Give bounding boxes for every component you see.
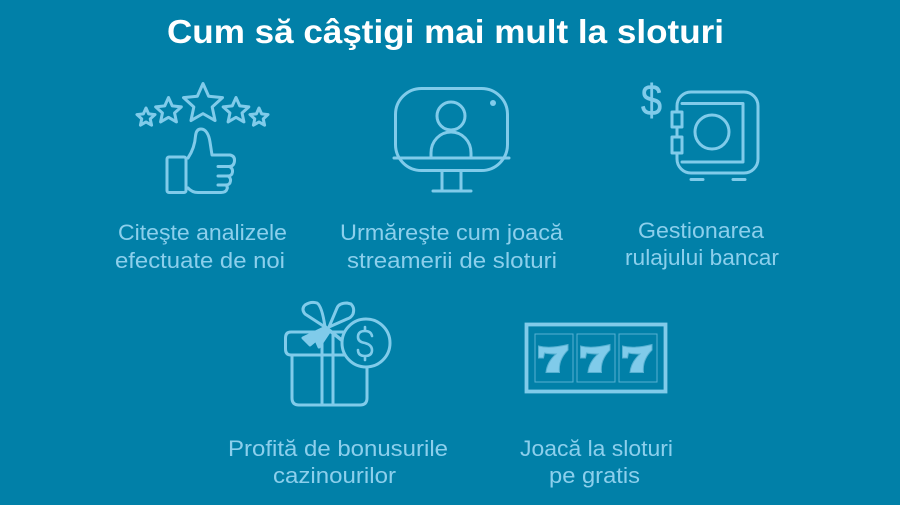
title: Cum să câştigi mai mult la sloturi (167, 13, 724, 50)
icon: dollar sign and safe (641, 76, 758, 180)
icon: dollar sign and safe: $ (641, 76, 662, 125)
icon: slot machine 777 (526, 324, 666, 392)
icon: five stars and thumbs up (137, 84, 268, 192)
caption: analize: Citeşte analizele (118, 220, 287, 245)
caption: rulaj: Gestionarea (638, 218, 765, 243)
caption: gratis: pe gratis (549, 463, 640, 488)
caption: gratis: Joacă la sloturi (520, 436, 673, 461)
caption: streameri: Urmăreşte cum joacă (340, 220, 564, 245)
caption: streameri: streamerii de sloturi (347, 248, 557, 273)
caption: bonusuri (228, 436, 448, 488)
caption: rulaj (625, 218, 779, 270)
caption: gratis (520, 436, 673, 488)
icon: monitor with streamer (394, 88, 509, 191)
caption: streameri (340, 220, 564, 273)
caption: rulaj: rulajului bancar (625, 245, 779, 270)
caption: bonusuri: cazinourilor (273, 463, 396, 488)
caption: analize (115, 220, 287, 273)
caption: analize: efectuate de noi (115, 248, 285, 273)
icon: gift box with dollar coin (286, 302, 390, 405)
caption: bonusuri: Profită de bonusurile (228, 436, 448, 461)
